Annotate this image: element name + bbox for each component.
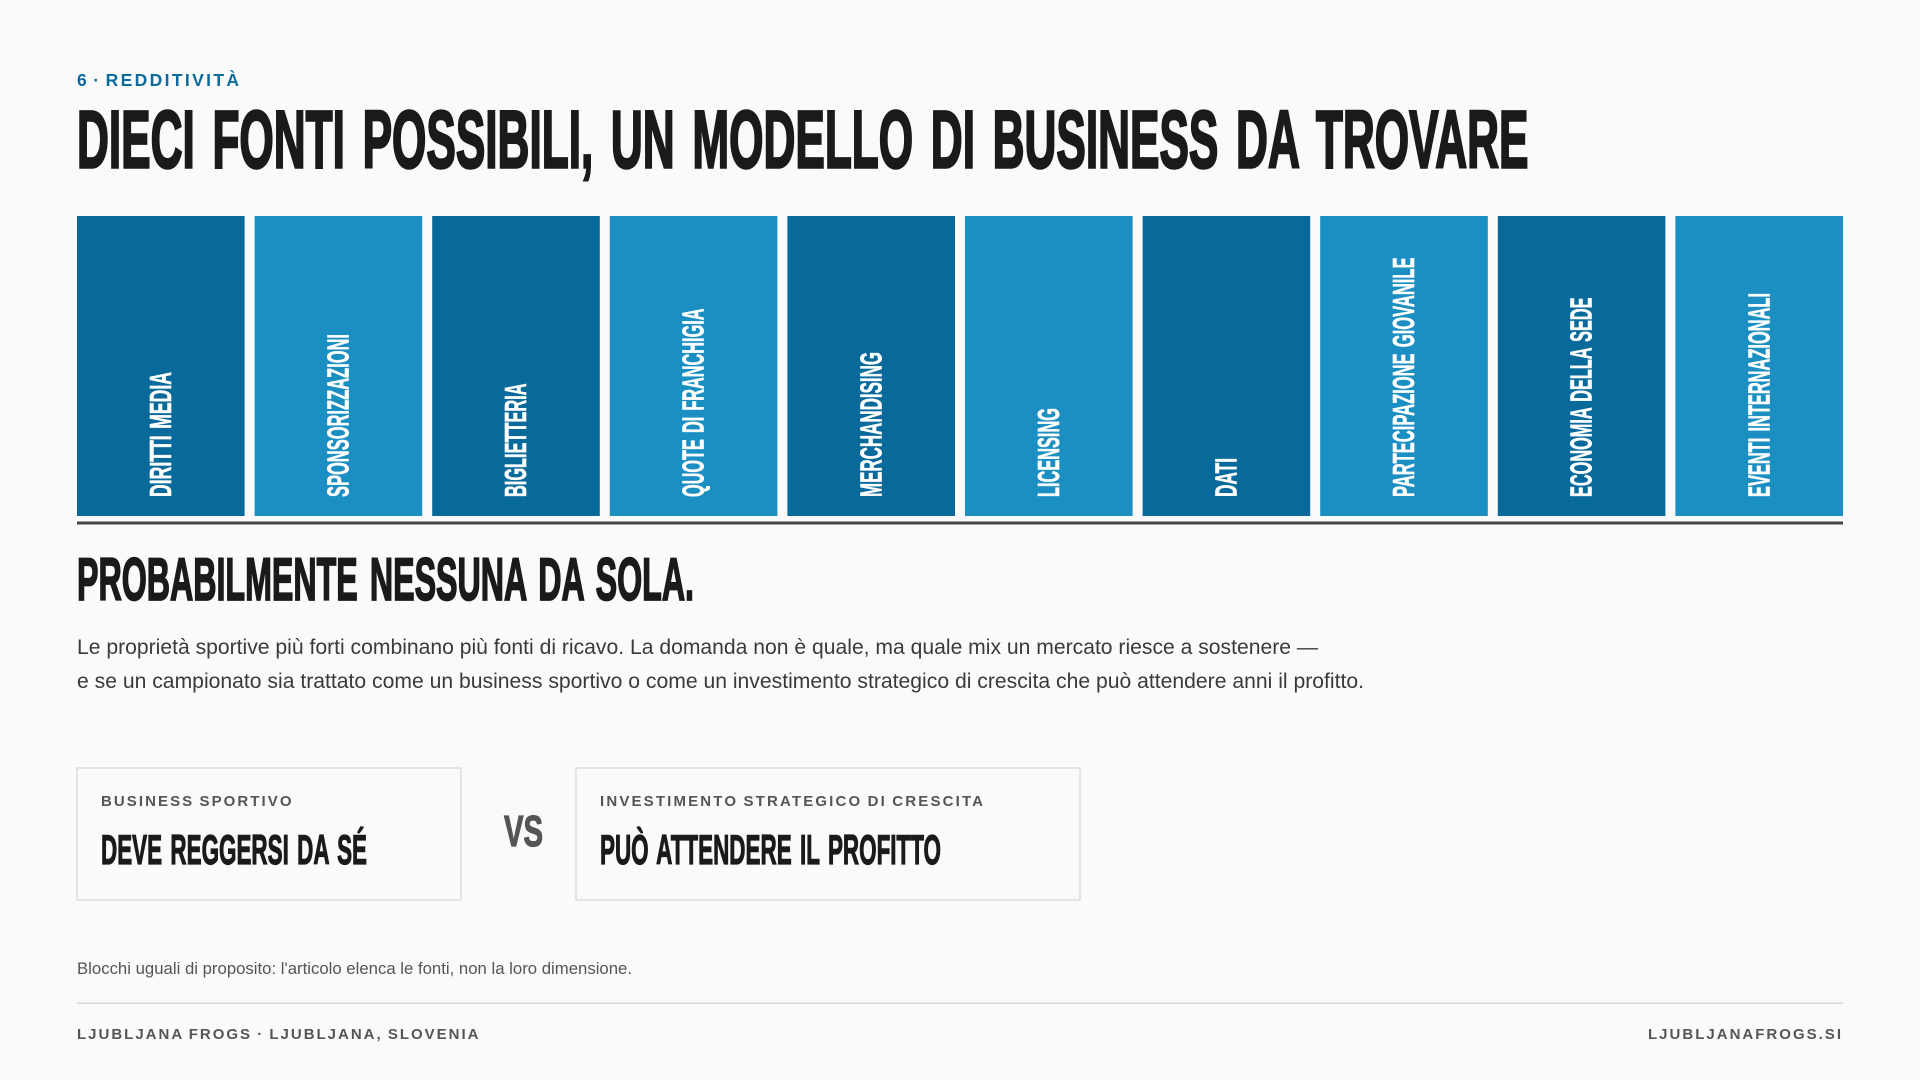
block: eventi internazionali — [1675, 216, 1843, 516]
block: diritti media: DIRITTI MEDIA — [144, 372, 178, 497]
eyebrow: section label: 6 · REDDITIVITÀ — [77, 69, 239, 90]
block: dati — [1143, 216, 1310, 516]
block: eventi internazionali: EVENTI INTERNAZIONALI — [1742, 293, 1776, 497]
block: economia della sede: ECONOMIA DELLA SEDE — [1565, 298, 1599, 497]
block: partecipazione giovanile: PARTECIPAZIONE GIOVANILE — [1387, 258, 1421, 497]
card: business sportivo: DEVE REGGERSI DA SÉ — [101, 826, 367, 873]
block: biglietteria: BIGLIETTERIA — [499, 384, 533, 497]
card: investimento strategico di crescita: INVESTIMENTO STRATEGICO DI CRESCITA — [600, 793, 983, 810]
block: partecipazione giovanile — [1320, 216, 1488, 516]
block: diritti media — [77, 216, 245, 516]
card: investimento strategico di crescita: PUÒ ATTENDERE IL PROFITTO — [600, 825, 941, 873]
block: sponsorizzazioni: SPONSORIZZAZIONI — [322, 334, 356, 497]
body text: e se un campionato sia trattato come un business sportivo o come un investimento strategico di crescita che può attendere anni il profitto. — [77, 670, 1364, 693]
card: business sportivo — [77, 768, 461, 900]
block: licensing: LICENSING — [1032, 408, 1066, 497]
block: dati: DATI — [1210, 458, 1244, 497]
block: quote di franchigia — [610, 216, 777, 516]
block: merchandising: MERCHANDISING — [854, 352, 888, 497]
footer left: LJUBLJANA FROGS · LJUBLJANA, SLOVENIA — [77, 1026, 479, 1043]
block: merchandising — [787, 216, 955, 516]
panel: ten revenue source blocks — [77, 216, 1843, 516]
body text — [77, 636, 1364, 693]
block: licensing — [965, 216, 1133, 516]
subheading: PROBABILMENTE NESSUNA DA SOLA. — [77, 546, 694, 613]
card: business sportivo: BUSINESS SPORTIVO — [101, 793, 292, 810]
body text: Le proprietà sportive più forti combinano più fonti di ricavo. La domanda non è quale, ma quale mix un mercato riesce a sostenere — — [77, 636, 1318, 659]
block: biglietteria — [432, 216, 600, 516]
block: sponsorizzazioni — [255, 216, 422, 516]
vs label: VS — [504, 807, 543, 856]
card: investimento strategico di crescita — [576, 768, 1080, 900]
footer right: LJUBLJANAFROGS.SI — [1648, 1026, 1841, 1043]
block: quote di franchigia: QUOTE DI FRANCHIGIA — [677, 308, 711, 497]
footnote: Blocchi uguali di proposito: l'articolo elenca le fonti, non la loro dimensione. — [77, 959, 632, 978]
block: economia della sede — [1498, 216, 1665, 516]
